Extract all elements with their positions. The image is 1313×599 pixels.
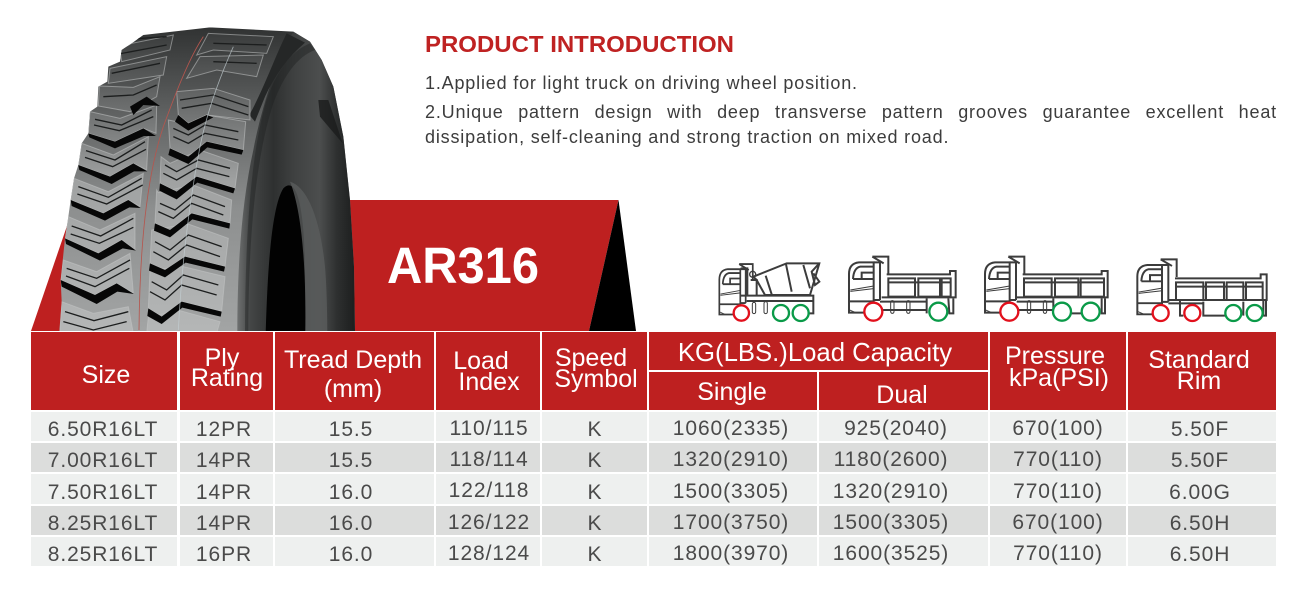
introduction text: 1.Applied for light truck on driving wheel position.	[425, 73, 858, 93]
row 8.25R16LT 14PR: 14PR	[196, 512, 252, 535]
row 7.50R16LT: 16.0	[329, 481, 373, 504]
introduction text: 2.Unique pattern design with deep transverse pattern grooves guarantee excellent heat	[425, 102, 1277, 122]
row 7.50R16LT: 1500(3305)	[673, 480, 789, 503]
tread sipes	[63, 37, 267, 330]
row 8.25R16LT 16PR: 16PR	[196, 543, 252, 566]
row 7.50R16LT	[48, 479, 1231, 504]
row 7.00R16LT: 1180(2600)	[834, 448, 948, 471]
row 7.50R16LT: 14PR	[196, 481, 252, 504]
tread lugs	[60, 33, 273, 333]
row 7.00R16LT: K	[588, 449, 602, 472]
row 8.25R16LT 16PR	[48, 542, 1230, 566]
introduction text: dissipation, self-cleaning and strong traction on mixed road.	[425, 127, 949, 147]
row 8.25R16LT 14PR: 670(100)	[1012, 511, 1104, 534]
row 7.50R16LT: 770(110)	[1013, 480, 1103, 503]
row 7.00R16LT: 14PR	[196, 449, 252, 472]
table header: Pressure	[1005, 342, 1105, 370]
table header: Size	[82, 361, 130, 389]
row 6.50R16LT: K	[588, 418, 602, 441]
icon: 2-axle dump truck	[849, 257, 956, 321]
row 8.25R16LT 14PR: 16.0	[329, 512, 373, 535]
row 7.00R16LT: 15.5	[329, 449, 373, 472]
row 7.50R16LT: 1320(2910)	[833, 480, 949, 503]
row 8.25R16LT 16PR: 1800(3970)	[673, 542, 789, 565]
row 7.00R16LT: 7.00R16LT	[48, 449, 158, 472]
row 7.00R16LT: 5.50F	[1171, 449, 1229, 472]
table header: Tread Depth	[284, 346, 422, 374]
tire photo	[57, 23, 357, 333]
row 8.25R16LT 14PR	[48, 511, 1230, 535]
table header: Standard	[1148, 346, 1250, 374]
table header: Speed	[555, 344, 627, 372]
row 7.00R16LT	[48, 448, 1229, 472]
row 6.50R16LT: 15.5	[329, 418, 373, 441]
table header: (mm)	[324, 375, 382, 403]
row 8.25R16LT 14PR: 126/122	[448, 511, 530, 534]
tread shadows	[61, 97, 243, 324]
table row backgrounds	[31, 412, 1276, 566]
table header: Rating	[191, 364, 263, 392]
row 8.25R16LT 14PR: 1500(3305)	[833, 511, 949, 534]
row 7.50R16LT: 7.50R16LT	[48, 481, 158, 504]
icon: 3-axle dump truck	[985, 257, 1108, 321]
row 8.25R16LT 16PR: 770(110)	[1013, 542, 1103, 565]
table header: kPa(PSI)	[1009, 364, 1109, 392]
row 8.25R16LT 16PR: 8.25R16LT	[48, 543, 158, 566]
red model banner	[31, 200, 636, 331]
table header: Index	[458, 368, 520, 396]
row 8.25R16LT 14PR: K	[588, 512, 602, 535]
introduction text	[425, 73, 1277, 147]
row 8.25R16LT 14PR: 6.50H	[1170, 512, 1230, 535]
row 7.50R16LT: 122/118	[449, 479, 529, 502]
row 8.25R16LT 16PR: K	[588, 543, 602, 566]
model name: AR316	[387, 237, 539, 294]
row 6.50R16LT: 110/115	[449, 417, 529, 440]
row 6.50R16LT: 12PR	[196, 418, 252, 441]
row 6.50R16LT: 670(100)	[1012, 417, 1104, 440]
row 6.50R16LT: 1060(2335)	[673, 417, 789, 440]
row 7.50R16LT: K	[588, 481, 602, 504]
table header: Dual	[876, 381, 928, 409]
table header: Rim	[1177, 367, 1221, 395]
table header	[31, 332, 1276, 410]
table header: Single	[697, 378, 767, 406]
icon: mixer truck	[719, 263, 819, 321]
row 7.00R16LT: 118/114	[449, 448, 529, 471]
icon: 4-axle dump truck	[1137, 259, 1267, 321]
row 7.50R16LT: 6.00G	[1169, 481, 1231, 504]
row 7.00R16LT: 1320(2910)	[673, 448, 789, 471]
table header: Load	[453, 347, 509, 375]
row 6.50R16LT: 5.50F	[1171, 418, 1229, 441]
row 8.25R16LT 16PR: 16.0	[329, 543, 373, 566]
table header: Ply	[205, 344, 240, 372]
row 7.00R16LT: 770(110)	[1013, 448, 1103, 471]
section heading: PRODUCT INTRODUCTION	[425, 31, 734, 57]
row 6.50R16LT: 925(2040)	[844, 417, 948, 440]
row 8.25R16LT 16PR: 128/124	[448, 542, 530, 565]
row 8.25R16LT 14PR: 1700(3750)	[673, 511, 789, 534]
row 8.25R16LT 14PR: 8.25R16LT	[48, 512, 158, 535]
table header: Symbol	[554, 365, 638, 393]
row 8.25R16LT 16PR: 6.50H	[1170, 543, 1230, 566]
row 6.50R16LT	[48, 417, 1229, 441]
row 8.25R16LT 16PR: 1600(3525)	[833, 542, 949, 565]
table header: KG(LBS.)Load Capacity	[678, 339, 952, 367]
row 6.50R16LT: 6.50R16LT	[48, 418, 158, 441]
